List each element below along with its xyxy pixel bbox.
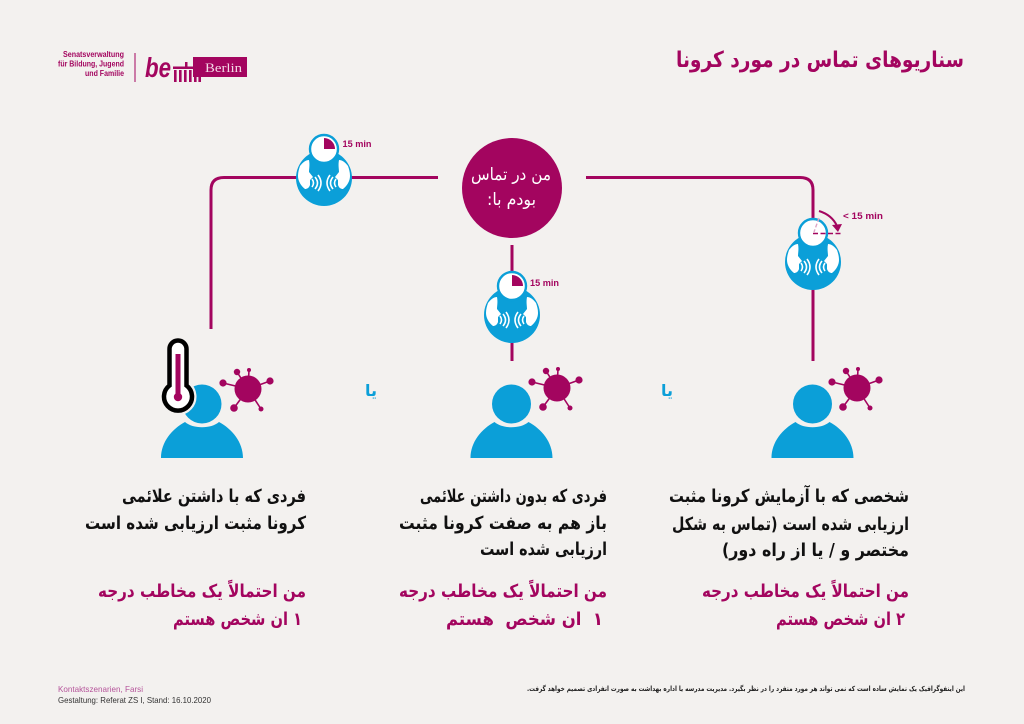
icon: contact 15 min, centre: 15 min [530, 278, 559, 289]
connector lines [211, 178, 813, 361]
text block: right person [669, 484, 909, 561]
result: left: ۱ ان شخص هستم [173, 609, 302, 630]
text block: centre person: ارزیابی شده است [480, 539, 607, 560]
footer credits: Kontaktszenarien, Farsi [58, 684, 143, 694]
icon: thermometer [164, 340, 192, 411]
result: right: من احتمالاً یک مخاطب درجه [702, 579, 909, 602]
person tested positive and virus [772, 367, 883, 458]
or label, right: یا [661, 381, 673, 400]
result: left: من احتمالاً یک مخاطب درجه [98, 579, 306, 602]
icon: contact 15 min, left [296, 135, 372, 206]
result: centre: من احتمالاً یک مخاطب درجه [399, 579, 607, 602]
text block: centre person: باز هم به صفت کرونا مثبت [399, 513, 607, 534]
central circle: I had contact with: من در تماس [471, 165, 551, 185]
result: right: ۲ ان شخص هستم [776, 609, 905, 630]
central circle: I had contact with: بودم با: [487, 190, 536, 210]
text block: left person: فردی که با داشتن علائمی [122, 486, 306, 507]
or label, left: یا [365, 381, 377, 400]
person with symptoms, thermometer and virus [161, 340, 274, 458]
logo: Senate Department Berlin: für Bildung, Jugend [58, 60, 124, 68]
logo: Senate Department Berlin [58, 50, 247, 83]
logo: Senate Department Berlin: und Familie [85, 69, 124, 78]
icon: contact 15 min, left: 15 min [342, 139, 372, 150]
footer credits [58, 684, 211, 705]
result: centre: ۱ ان شخص هستم [446, 609, 603, 630]
text block: right person: ارزیابی شده است (تماس به شکل [672, 514, 909, 535]
result: centre [399, 579, 607, 630]
text block: left person: کرونا مثبت ارزیابی شده است [85, 513, 306, 534]
result: left [98, 579, 306, 630]
footer credits: Gestaltung: Referat ZS I, Stand: 16.10.2020 [58, 695, 211, 705]
text block: centre person: فردی که بدون داشتن علائمی [420, 486, 607, 507]
logo: Senate Department Berlin: Senatsverwaltung [63, 50, 124, 59]
central circle: I had contact with [462, 138, 562, 238]
icon: contact under 15 min, right: < 15 min [843, 211, 883, 222]
text block: centre person [399, 486, 607, 560]
text block: right person: شخصی که با آزمایش کرونا مثبت [669, 484, 909, 507]
person without symptoms and virus [470, 367, 583, 458]
result: right [702, 579, 909, 630]
logo: Senate Department Berlin: Berlin [205, 60, 243, 75]
text block: right person: مختصر و / یا از راه دور) [722, 540, 909, 561]
logo: Senate Department Berlin: be [145, 52, 171, 83]
text block: left person [85, 486, 306, 534]
title: سناریوهای تماس در مورد کرونا [676, 48, 964, 73]
icon: contact under 15 min, right [785, 211, 883, 290]
icon: contact 15 min, centre [484, 272, 559, 343]
